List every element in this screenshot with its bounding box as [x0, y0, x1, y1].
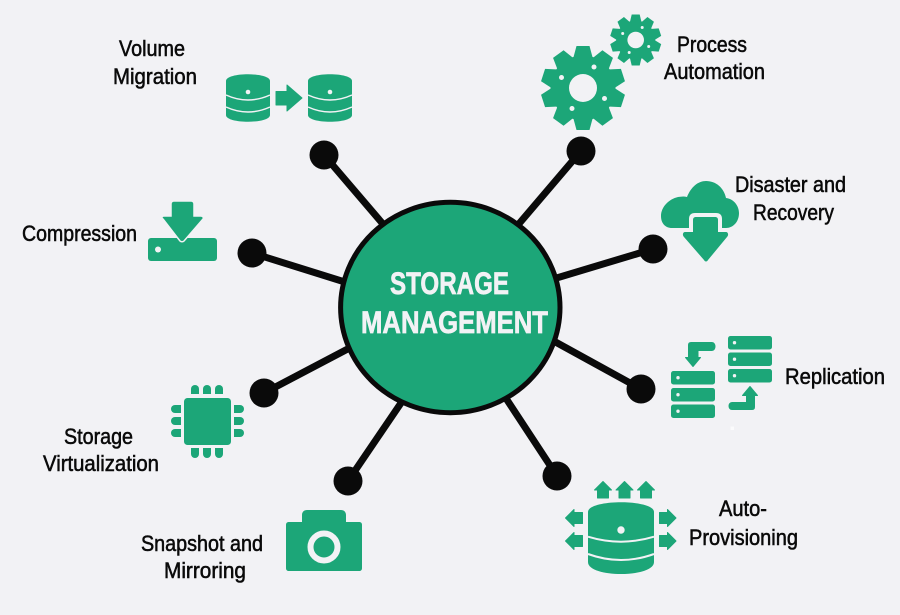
icon: disaster recovery cloud	[661, 181, 739, 262]
label: auto-provisioning: Provisioning	[689, 525, 798, 550]
icon: volume migration databases	[226, 74, 352, 122]
label: snapshot and mirroring	[141, 531, 263, 583]
label: disaster and recovery: Disaster and	[735, 172, 846, 197]
icon: replication server stacks	[671, 336, 772, 430]
label: disaster and recovery	[735, 172, 846, 225]
central hub: storage management: MANAGEMENT	[361, 304, 548, 340]
label: process automation: Automation	[664, 59, 765, 84]
label: auto-provisioning: Auto-	[719, 496, 767, 521]
central hub: storage management: STORAGE	[390, 265, 509, 301]
icon: snapshot camera	[286, 510, 362, 571]
label: process automation: Process	[677, 32, 747, 57]
icon: storage virtualization chip	[171, 385, 244, 458]
label: volume migration: Volume	[119, 36, 185, 61]
label: replication: Replication	[785, 364, 885, 389]
central hub: storage management	[341, 202, 560, 413]
icon: process automation gears	[540, 14, 662, 130]
connector spokes and end nodes	[238, 136, 668, 496]
icon: auto-provisioning database with arrows	[566, 482, 676, 574]
label: auto-provisioning	[689, 496, 798, 550]
label: storage virtualization: Storage	[64, 424, 133, 449]
label: storage virtualization: Virtualization	[43, 451, 159, 476]
label: disaster and recovery: Recovery	[753, 200, 835, 225]
label: process automation	[664, 32, 765, 84]
label: compression: Compression	[22, 221, 137, 246]
label: volume migration	[113, 36, 197, 89]
label: volume migration: Migration	[113, 64, 197, 89]
label: snapshot and mirroring: Snapshot and	[141, 531, 263, 556]
label: storage virtualization	[43, 424, 159, 476]
icon: compression download tray	[148, 201, 217, 261]
label: snapshot and mirroring: Mirroring	[164, 558, 246, 583]
